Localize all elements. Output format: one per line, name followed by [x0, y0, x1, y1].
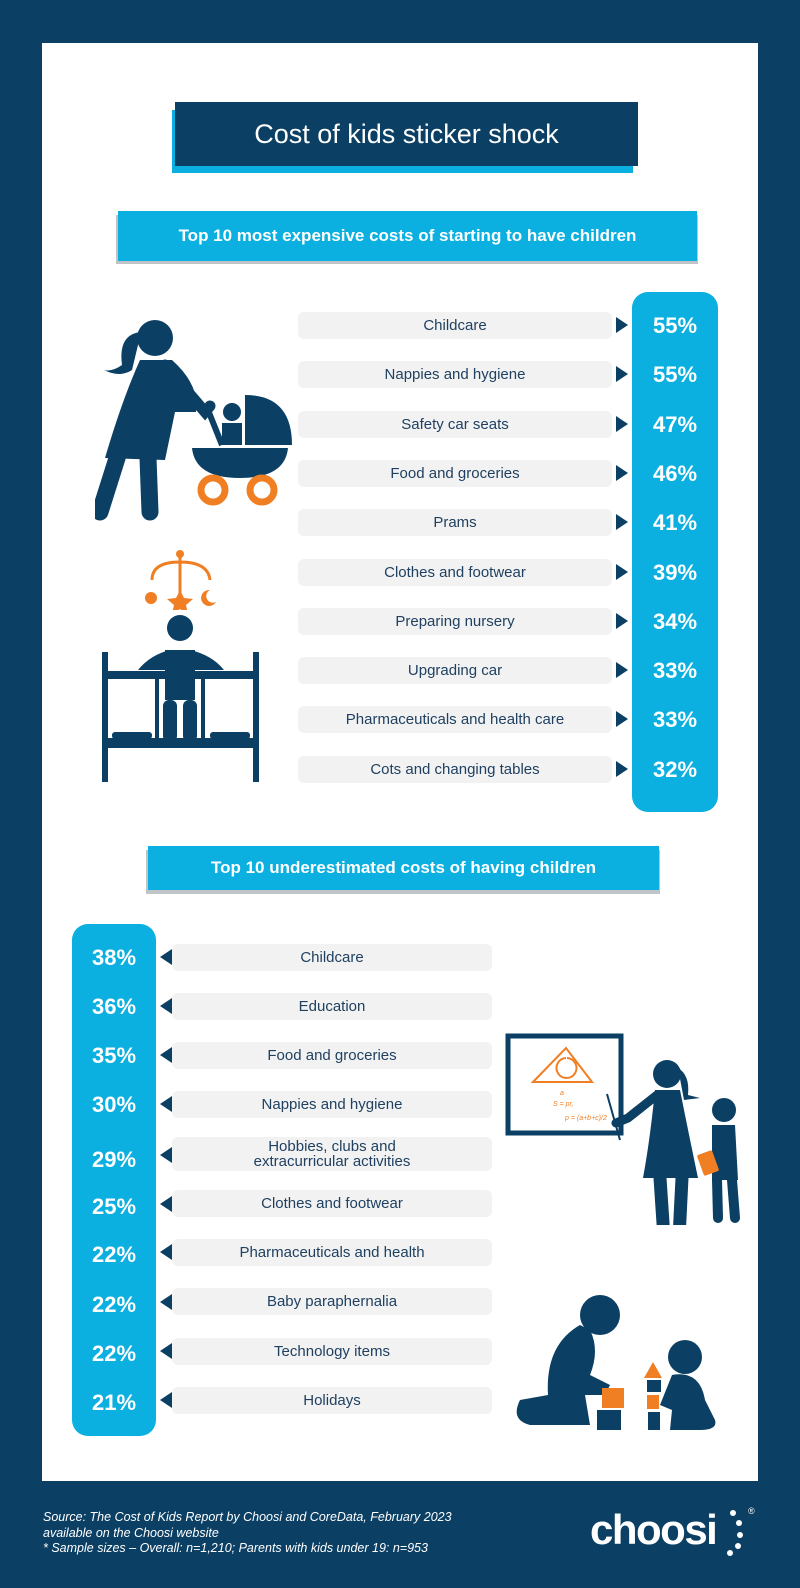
- chart: most expensive costs: Food and groceries: [390, 465, 520, 482]
- chart: underestimated costs: 35%: [92, 1043, 136, 1068]
- logo: choosi: ®: [748, 1506, 755, 1516]
- chart: most expensive costs: [298, 292, 718, 812]
- chart: underestimated costs: Food and groceries: [267, 1047, 397, 1064]
- icon: mother with pram: [95, 320, 292, 520]
- chart: most expensive costs: 55%: [653, 313, 697, 338]
- chart: most expensive costs: Pharmaceuticals and health care: [346, 711, 564, 728]
- chart: most expensive costs: Prams: [433, 514, 477, 531]
- chart: underestimated costs: 38%: [92, 945, 136, 970]
- chart: underestimated costs: Pharmaceuticals and health: [239, 1244, 425, 1261]
- subtitle: top 10 underestimated: Top 10 underestimated costs of having children: [211, 858, 596, 877]
- chart: underestimated costs: Nappies and hygiene: [262, 1096, 402, 1113]
- footer source text: [43, 1510, 452, 1555]
- chart: underestimated costs: Hobbies, clubs and: [268, 1138, 396, 1155]
- icon: teacher at whiteboard with child: S = pr,: [553, 1101, 573, 1108]
- chart: underestimated costs: 22%: [92, 1292, 136, 1317]
- chart: most expensive costs: 33%: [653, 658, 697, 683]
- chart: underestimated costs: [72, 924, 492, 1436]
- chart: most expensive costs: 33%: [653, 707, 697, 732]
- chart: most expensive costs: Nappies and hygiene: [385, 366, 525, 383]
- chart: underestimated costs: 29%: [92, 1147, 136, 1172]
- chart: underestimated costs: Clothes and footwear: [261, 1195, 403, 1212]
- chart: underestimated costs: 21%: [92, 1390, 136, 1415]
- chart: most expensive costs: 41%: [653, 510, 697, 535]
- chart: underestimated costs: extracurricular activities: [254, 1153, 410, 1170]
- icon: teacher at whiteboard with child: [506, 1034, 740, 1225]
- chart: underestimated costs: Childcare: [300, 949, 364, 966]
- subtitle: top 10 most expensive: Top 10 most expensive costs of starting to have children: [179, 226, 636, 245]
- title: Cost of kids sticker shock: [254, 118, 559, 148]
- chart: underestimated costs: 25%: [92, 1194, 136, 1219]
- chart: underestimated costs: 22%: [92, 1242, 136, 1267]
- chart: most expensive costs: 46%: [653, 461, 697, 486]
- chart: underestimated costs: 36%: [92, 994, 136, 1019]
- icon: adult and child playing with blocks: [516, 1295, 716, 1430]
- chart: underestimated costs: Education: [299, 998, 365, 1015]
- chart: underestimated costs: Technology items: [274, 1343, 390, 1360]
- chart: underestimated costs: Holidays: [303, 1392, 361, 1409]
- chart: most expensive costs: 55%: [653, 362, 697, 387]
- chart: most expensive costs: Clothes and footwear: [384, 564, 526, 581]
- title: [172, 102, 638, 173]
- chart: most expensive costs: Childcare: [423, 317, 487, 334]
- icon: teacher at whiteboard with child: p = (a+b+c)/2: [564, 1115, 607, 1122]
- logo: choosi: choosi: [590, 1506, 716, 1553]
- subtitle: top 10 underestimated: [146, 846, 660, 894]
- chart: most expensive costs: 32%: [653, 757, 697, 782]
- subtitle: top 10 most expensive: [116, 211, 698, 264]
- chart: underestimated costs: Baby paraphernalia: [267, 1293, 397, 1310]
- chart: most expensive costs: 34%: [653, 609, 697, 634]
- footer source text: * Sample sizes – Overall: n=1,210; Parents with kids under 19: n=953: [43, 1541, 428, 1555]
- chart: most expensive costs: Cots and changing tables: [370, 761, 540, 778]
- footer source text: Source: The Cost of Kids Report by Choosi and CoreData, February 2023: [43, 1510, 452, 1524]
- icon: teacher at whiteboard with child: a: [560, 1090, 564, 1097]
- chart: underestimated costs: 30%: [92, 1092, 136, 1117]
- chart: most expensive costs: 39%: [653, 560, 697, 585]
- footer source text: available on the Choosi website: [43, 1526, 219, 1540]
- chart: most expensive costs: 47%: [653, 412, 697, 437]
- chart: most expensive costs: Safety car seats: [401, 416, 509, 433]
- icon: baby mobile: [145, 550, 216, 610]
- chart: most expensive costs: Preparing nursery: [395, 613, 515, 630]
- icon: child in crib: [102, 615, 259, 782]
- chart: most expensive costs: Upgrading car: [408, 662, 502, 679]
- chart: underestimated costs: 22%: [92, 1341, 136, 1366]
